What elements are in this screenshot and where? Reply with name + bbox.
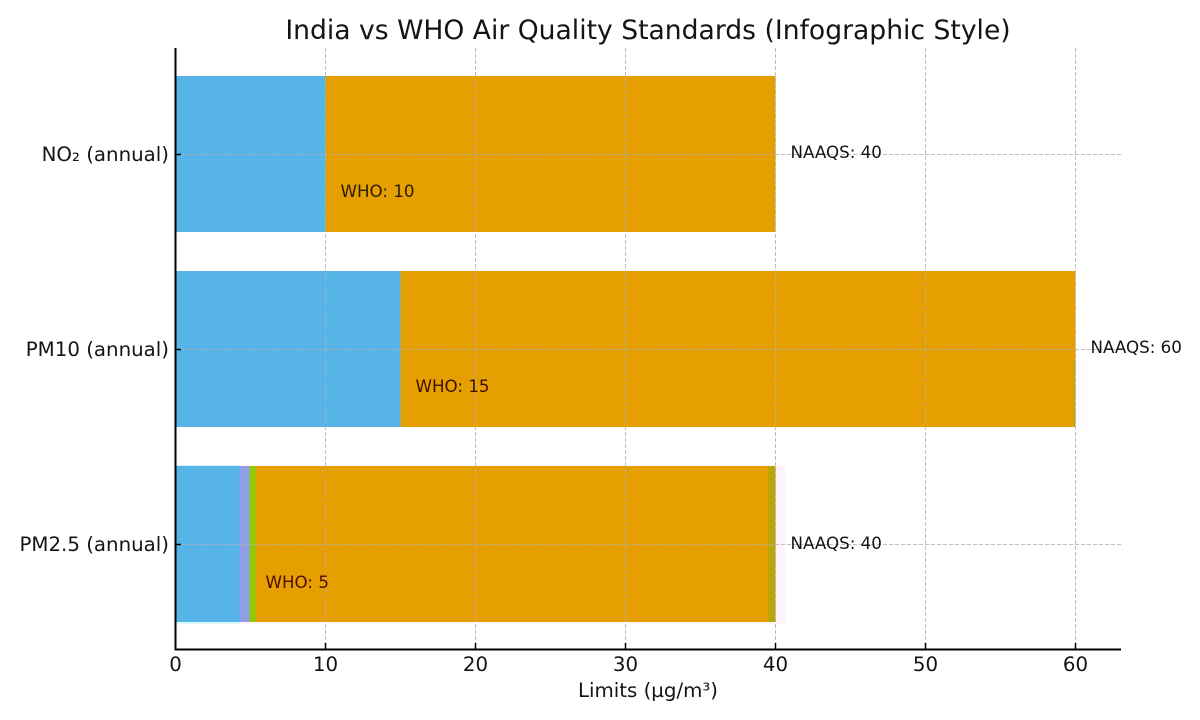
bar: PM10 annual [176,271,1087,431]
x axis tick labels: 10 [313,653,338,676]
x axis tick labels: 30 [613,653,638,676]
x axis tick labels [169,653,1088,676]
value labels: PM10: NAAQS: 60 [1090,337,1182,357]
gridlines [175,48,1121,649]
x axis tick labels: 50 [913,653,938,676]
axes [174,48,1121,650]
x axis title: Limits (µg/m³) [578,679,718,702]
value labels: NO2: WHO: 10 [340,181,415,201]
x axis tick labels: 60 [1063,653,1088,676]
value labels: PM2.5: NAAQS: 40 [790,533,882,553]
x axis tick labels: 40 [763,653,788,676]
title: India vs WHO Air Quality Standards (Infographic Style) [285,15,1011,46]
y axis labels: NO₂ (annual) [42,143,169,166]
y axis labels: PM10 (annual) [26,338,169,361]
value labels: PM2.5: WHO: 5 [266,572,329,592]
value labels: NO2: NAAQS: 40 [790,142,882,162]
x axis tick labels: 0 [169,653,182,676]
value labels: NO2 [340,142,882,201]
value labels: PM2.5 [266,533,882,592]
value labels: PM10: WHO: 15 [416,376,490,396]
x axis tick labels: 20 [463,653,488,676]
bar: NO2 annual [176,76,776,232]
bar: PM2.5 annual [176,465,785,624]
y axis labels: PM2.5 (annual) [19,533,169,556]
y axis labels [19,143,169,556]
value labels: PM10 [416,337,1182,396]
